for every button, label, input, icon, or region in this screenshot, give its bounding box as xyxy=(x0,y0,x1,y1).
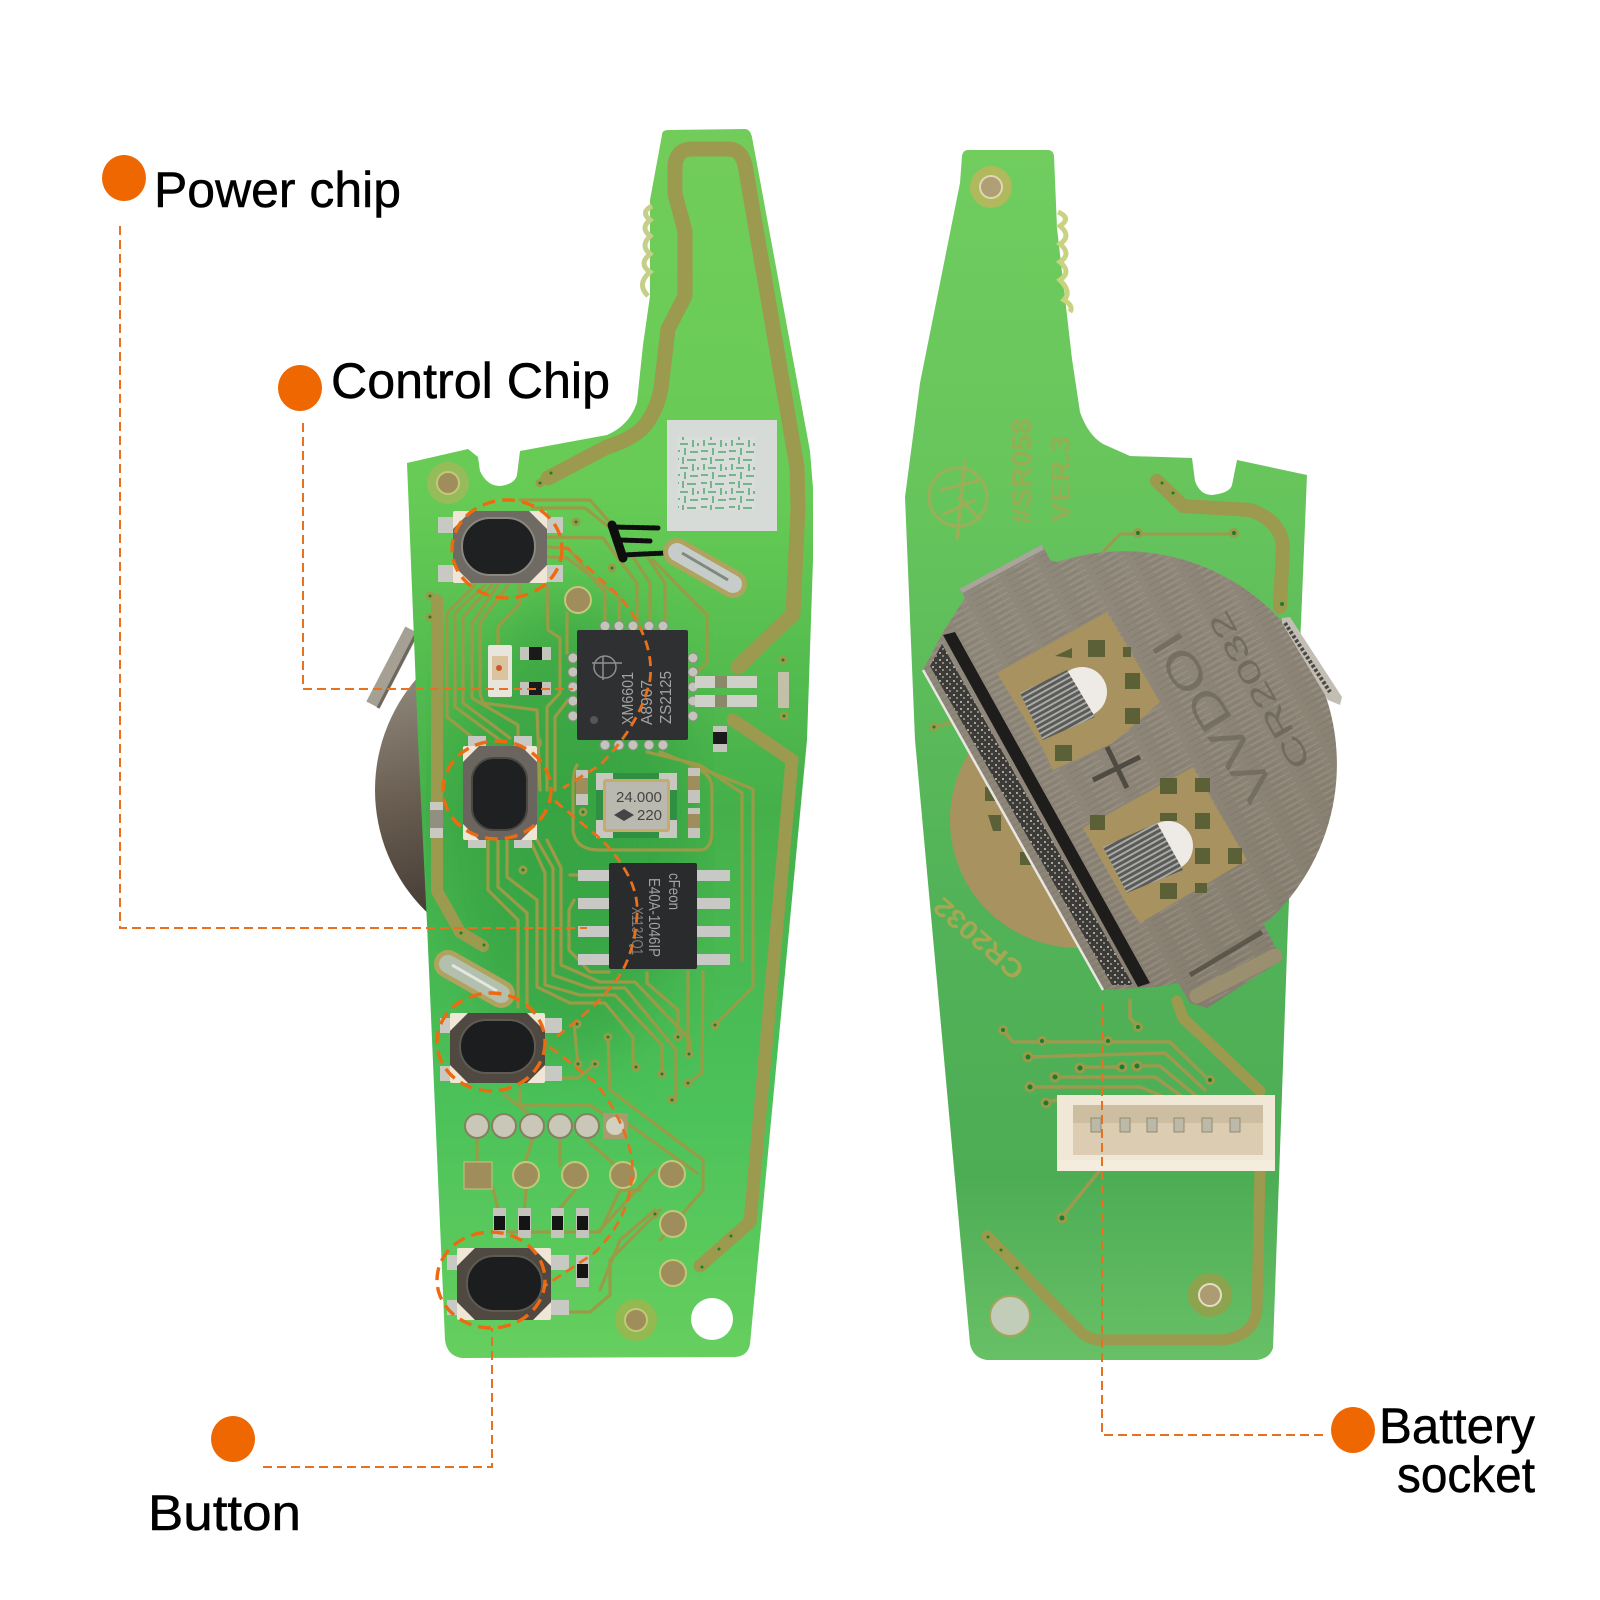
label: Button xyxy=(148,1485,301,1541)
switch 3 xyxy=(440,1013,562,1083)
callout: Control Chip xyxy=(278,353,610,689)
silk text model: VER.3 xyxy=(1045,436,1076,522)
orange marker xyxy=(102,155,146,201)
silk text model: #SR058 xyxy=(1006,418,1037,524)
LED xyxy=(488,645,512,697)
crystal 24.000: 24.000 xyxy=(616,789,662,806)
window two pad xyxy=(1083,767,1247,923)
pad xyxy=(565,587,591,613)
embossed mark CR2032: CR2032 xyxy=(1203,605,1318,775)
board outline xyxy=(407,129,813,1358)
switch 1 xyxy=(438,511,563,583)
panel: battery holder clip xyxy=(923,546,1342,1008)
holder body xyxy=(923,546,1337,1008)
crystal 24.000 xyxy=(596,773,677,838)
lower roll tab xyxy=(1190,932,1275,996)
switch 2 xyxy=(463,736,537,848)
control chip XM6601: A8907 xyxy=(639,680,656,725)
bottom left solder pad xyxy=(990,1296,1030,1336)
orange marker xyxy=(211,1416,255,1462)
orange marker xyxy=(1331,1407,1375,1453)
callout: Power chip xyxy=(102,155,587,928)
infographic canvas xyxy=(102,129,1536,1531)
vias xyxy=(427,470,787,1270)
crystal capacitors xyxy=(430,768,700,838)
window one pad xyxy=(997,612,1160,770)
through hole xyxy=(691,1298,733,1340)
label: Control Chip xyxy=(331,353,610,409)
bottom right mounting pad xyxy=(1188,1273,1232,1317)
speckled fold band xyxy=(930,644,1133,985)
battery holder seen behind left board xyxy=(373,620,715,960)
panel: left PCB front side xyxy=(407,129,813,1358)
header pin holes xyxy=(465,1113,628,1139)
label: socket xyxy=(1397,1447,1535,1503)
orange marker xyxy=(278,365,322,411)
gold battery pad disc xyxy=(950,692,1206,948)
small diodes xyxy=(493,1208,589,1287)
antenna notch teeth xyxy=(642,206,652,296)
dashed link between buttons xyxy=(543,548,651,1287)
callout: Battery socket xyxy=(1102,1003,1535,1503)
board outline xyxy=(905,150,1307,1360)
leader line xyxy=(303,423,573,689)
embossed mark VVDOI: VVDOI xyxy=(1141,623,1285,811)
switch 4 xyxy=(447,1248,569,1320)
button outline circles xyxy=(437,500,562,1328)
black solder marks xyxy=(612,525,665,558)
leader line xyxy=(1102,1003,1327,1435)
control chip XM6601 xyxy=(568,621,698,750)
leader line xyxy=(263,1328,492,1467)
top trace xyxy=(931,480,1286,730)
mounting hole bottom xyxy=(615,1299,657,1341)
copper traces xyxy=(447,500,753,1312)
silk text CR2032: CR2032 xyxy=(927,891,1030,986)
label: Battery xyxy=(1379,1398,1535,1454)
silk logo xyxy=(929,460,987,540)
battery socket connector xyxy=(1057,1095,1275,1171)
power chip cFeon: cFeon xyxy=(665,873,682,910)
callout dashed circles and links xyxy=(437,500,651,1328)
brushed metal finish xyxy=(923,546,1337,1008)
leader line xyxy=(120,226,587,928)
power chip cFeon xyxy=(578,863,730,969)
power chip cFeon: X1134Q1 xyxy=(628,907,645,955)
black fold band xyxy=(943,632,1150,987)
antenna notch teeth xyxy=(1058,212,1071,312)
callout: Button xyxy=(148,1328,492,1541)
control chip XM6601: XM6601 xyxy=(620,672,637,725)
power chip cFeon: E40A-1046IP xyxy=(645,878,662,957)
control chip XM6601: ZS2125 xyxy=(658,671,675,724)
silk text model xyxy=(1006,418,1076,524)
label: Power chip xyxy=(154,162,401,218)
solder blob upper xyxy=(677,552,733,584)
QR code sticker xyxy=(667,420,777,531)
mounting hole top xyxy=(427,462,469,504)
top mounting pad xyxy=(970,166,1012,208)
bright fold edges xyxy=(923,670,1103,990)
crystal 24.000: 220 xyxy=(637,807,662,824)
small resistors near LED xyxy=(520,647,551,695)
top flap highlight xyxy=(961,547,1043,591)
solder blob lower xyxy=(448,964,501,994)
lower gold traces xyxy=(985,1000,1260,1340)
antenna trace xyxy=(437,149,798,1266)
gold test pads xyxy=(464,1161,686,1286)
small passive row right of chip xyxy=(695,672,789,752)
panel: right PCB back side xyxy=(905,150,1307,1360)
embossed plus xyxy=(1093,747,1140,788)
side tab xyxy=(1282,617,1342,705)
